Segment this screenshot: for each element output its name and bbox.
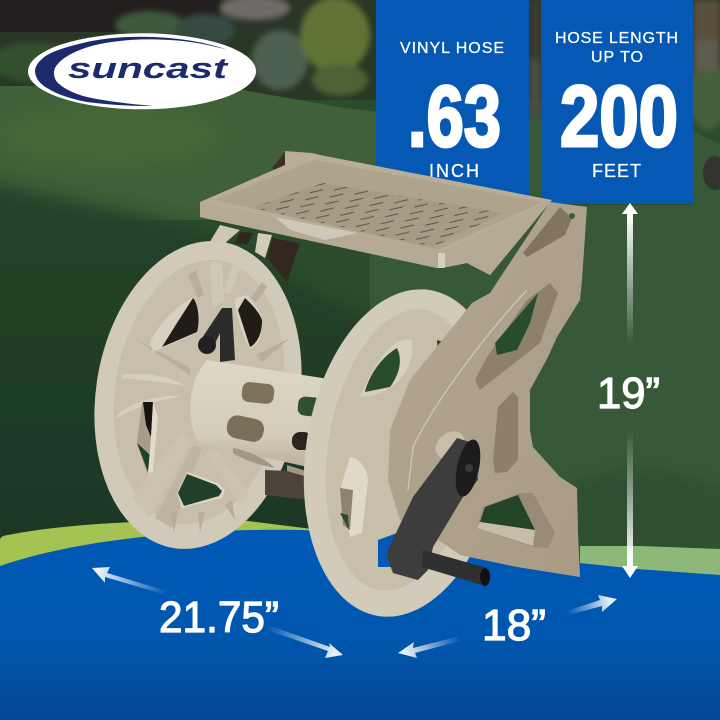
right reel disc [281,275,527,631]
hub mechanics [265,470,310,500]
label: hose length up to: HOSE LENGTH [555,30,678,47]
wall bracket [388,202,587,577]
height label: 19” [597,369,660,418]
disc ribs [117,262,290,533]
panel: hose length spec [541,0,693,204]
rock [703,156,720,190]
long oval hole [475,283,558,390]
logo: suncast [28,33,256,109]
label: vinyl hose: VINYL HOSE [400,40,504,57]
width arrows [92,567,343,658]
logo: suncast: suncast [68,53,229,85]
panel: vinyl hose spec [376,0,529,195]
depth arrows [398,595,617,658]
depth label: 18” [482,601,546,650]
height arrow [622,203,638,578]
mid recess [493,392,518,473]
top slot [523,207,572,257]
hose reel product [73,151,587,631]
hub cylinder [190,360,335,476]
rear supports [208,152,300,282]
platform: blue base with green edge [0,520,720,720]
width label: 21.75” [159,593,279,642]
value: .63: .63 [408,69,501,165]
value: 200: 200 [560,69,678,165]
unit: inch: INCH [429,161,479,181]
label: hose length up to: UP TO [591,49,643,66]
disc holes [137,295,262,508]
nozzle [198,308,235,362]
lower triangular hole [477,493,555,548]
label: hose length up to [555,30,678,66]
tray [200,151,552,275]
unit: feet: FEET [592,161,641,181]
left reel disc [73,226,323,564]
crank handle [387,426,490,586]
